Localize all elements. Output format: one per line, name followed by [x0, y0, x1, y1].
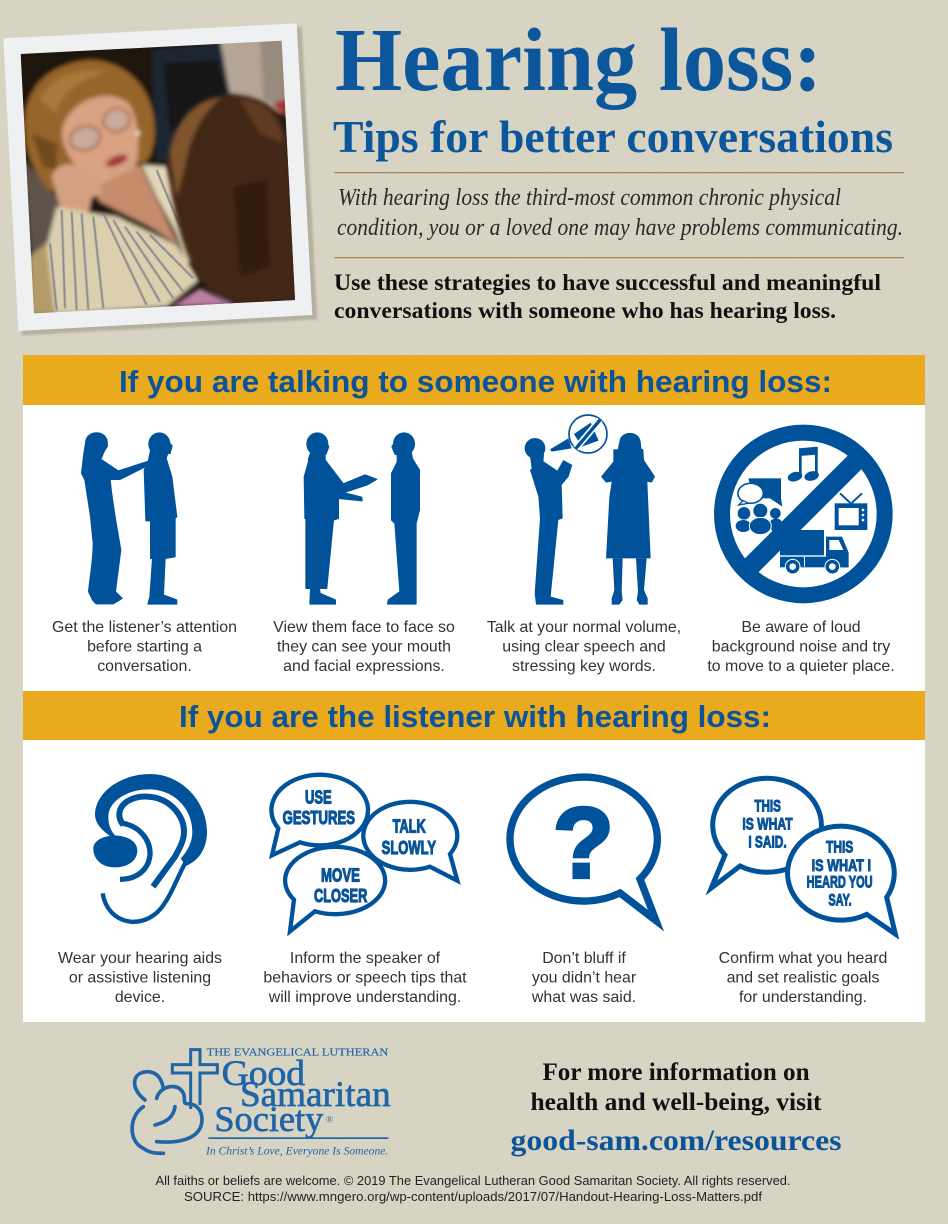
icon: two speech bubbles confirming what was said: HEARD YOU	[807, 872, 873, 891]
caption: Don’t bluff if	[542, 950, 626, 967]
section banner: If you are talking to someone with hearing loss:	[119, 364, 832, 399]
icon: no background noise sign	[722, 433, 885, 595]
music notes	[787, 447, 820, 483]
logo wordmark: Society	[214, 1099, 323, 1139]
icon: speech bubble with question mark: ?	[553, 788, 614, 900]
caption: Confirm what you heard	[719, 950, 887, 967]
talking people	[736, 478, 783, 535]
main title: Hearing loss:	[335, 11, 822, 110]
caption: and set realistic goals	[727, 970, 879, 986]
icon: two speech bubbles confirming what was said: IS WHAT I	[812, 856, 871, 875]
caption: Inform the speaker of	[290, 950, 441, 967]
strategy statement in bold: conversations with someone who has hearing loss.	[334, 298, 836, 324]
footer note: All faiths or beliefs are welcome. © 2019 The Evangelical Lutheran Good Samaritan Society. All rights reserved.	[156, 1174, 790, 1188]
call to action: For more information on	[542, 1059, 810, 1086]
caption: they can see your mouth	[277, 638, 451, 656]
strategy statement in bold	[334, 270, 881, 324]
icon: three speech bubbles with tips	[271, 775, 457, 931]
caption: behaviors or speech tips that	[263, 970, 467, 986]
logo: Good Samaritan Society	[132, 1047, 391, 1157]
icon: two speech bubbles confirming what was said: I SAID.	[748, 832, 787, 851]
icon: two speech bubbles confirming what was said: SAY.	[828, 890, 852, 909]
footer note: SOURCE: https://www.mngero.org/wp-content/uploads/2017/07/Handout-Hearing-Loss-Matters.pdf	[184, 1190, 763, 1204]
intro text in italics	[337, 185, 903, 241]
icon: three speech bubbles with tips: TALK	[393, 816, 426, 837]
icon: two speech bubbles confirming what was said	[711, 778, 895, 934]
caption: using clear speech and	[502, 638, 666, 656]
caption: will improve understanding.	[268, 989, 461, 1006]
caption: conversation.	[97, 658, 192, 675]
icon: person with crossed-out megaphone and woman covering ears	[525, 415, 655, 605]
icon: three speech bubbles with tips: SLOWLY	[382, 837, 436, 858]
caption: and facial expressions.	[283, 658, 445, 675]
logo wordmark: Samaritan	[240, 1074, 391, 1114]
caption: device.	[115, 989, 165, 1006]
icon: cross	[172, 1050, 217, 1109]
caption: Be aware of loud	[741, 619, 861, 636]
subtitle: Tips for better conversations	[333, 111, 893, 162]
logo wordmark: Good	[222, 1053, 305, 1093]
caption: View them face to face so	[273, 619, 455, 636]
icon: speech bubble with question mark	[510, 777, 657, 921]
caption: stressing key words.	[512, 658, 656, 675]
caption: what was said.	[531, 989, 636, 1006]
icon: ear with hearing aid	[93, 774, 207, 922]
icon: embracing figures	[132, 1072, 202, 1153]
logo wordmark	[205, 1047, 391, 1157]
photo: woman in conversation, in tilted white frame	[3, 23, 317, 335]
logo wordmark: THE EVANGELICAL LUTHERAN	[207, 1047, 388, 1059]
section banner: If you are the listener with hearing loss:	[179, 699, 771, 734]
caption: Wear your hearing aids	[58, 950, 222, 967]
logo wordmark: In Christ’s Love, Everyone Is Someone.	[205, 1144, 388, 1157]
section banner	[23, 691, 925, 740]
caption: background noise and try	[712, 638, 890, 656]
television	[835, 493, 867, 530]
icon: two speech bubbles confirming what was said: IS WHAT	[742, 814, 793, 833]
icon: three speech bubbles with tips: GESTURES	[283, 807, 355, 828]
caption: Talk at your normal volume,	[487, 619, 681, 636]
icon: three speech bubbles with tips: MOVE	[321, 865, 360, 886]
caption: to move to a quieter place.	[707, 658, 895, 675]
title block	[333, 11, 904, 324]
strategy statement in bold: Use these strategies to have successful and meaningful	[334, 270, 881, 296]
icon: two speech bubbles confirming what was said: THIS	[826, 838, 853, 857]
call to action: health and well-being, visit	[530, 1089, 822, 1116]
footer note	[156, 1174, 790, 1204]
caption: for understanding.	[739, 989, 867, 1006]
section banner	[23, 355, 925, 405]
icon: three speech bubbles with tips: USE	[305, 786, 332, 807]
icon: three speech bubbles with tips: CLOSER	[314, 885, 368, 906]
website link: good-sam.com/resources	[510, 1124, 842, 1157]
panel: listener with hearing loss	[23, 691, 925, 1022]
icon: person touching listener's shoulder	[82, 433, 177, 604]
slash	[744, 454, 862, 573]
intro text in italics: With hearing loss the third-most common chronic physical	[338, 185, 841, 211]
panel: talking to someone with hearing loss	[23, 355, 925, 691]
truck	[780, 530, 849, 574]
logo wordmark: ®	[326, 1114, 333, 1125]
caption: you didn’t hear	[532, 970, 637, 986]
caption: Get the listener’s attention	[52, 619, 237, 636]
icon: two people face to face	[304, 433, 419, 604]
caption: before starting a	[87, 638, 202, 656]
caption: or assistive listening	[69, 970, 211, 986]
call to action	[510, 1059, 842, 1157]
icon: two speech bubbles confirming what was said: THIS	[754, 797, 781, 816]
